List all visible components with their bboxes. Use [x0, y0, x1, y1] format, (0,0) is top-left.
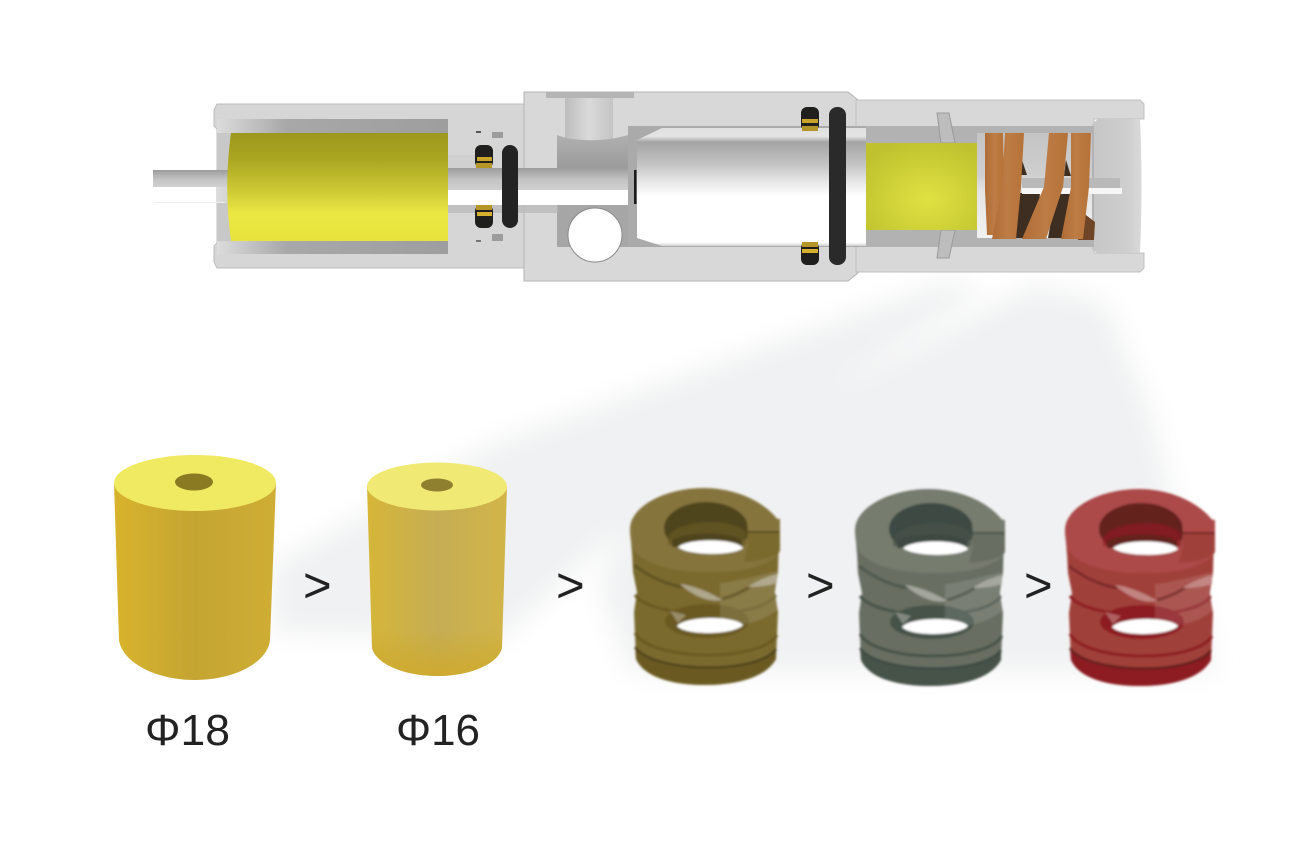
left yellow cylinder [227, 133, 448, 241]
right end cap [1092, 119, 1142, 253]
greater-than sign 1: > [303, 559, 332, 613]
greater-than sign 3: > [806, 559, 835, 613]
spring: red [1065, 489, 1215, 686]
left o-ring [502, 145, 518, 228]
lower grey chamber [557, 205, 628, 247]
piston [637, 128, 866, 246]
spring shadows [1014, 160, 1075, 238]
left seal lower [475, 205, 493, 228]
right yellow cylinder [866, 143, 977, 230]
spring: grey-green [855, 489, 1005, 686]
spring cavity backdrop [977, 133, 1092, 238]
smaller cylinder Φ16 [367, 462, 507, 676]
small gaskets [476, 131, 503, 242]
centre hole [175, 474, 213, 490]
housing: centre block [524, 92, 858, 281]
right seal upper [801, 107, 819, 131]
label: diameter 16: Φ16 [396, 706, 480, 755]
white through hole [568, 208, 622, 262]
washer [937, 113, 955, 258]
right rod [1022, 178, 1120, 188]
copper spring [985, 133, 1122, 240]
spring: olive [630, 488, 780, 685]
right cavity [866, 126, 1094, 247]
housing: right tube [856, 100, 1144, 272]
large cylinder Φ18 [114, 455, 276, 680]
port cap line [546, 92, 634, 98]
right o-ring [829, 107, 846, 265]
upper grey chamber [557, 135, 628, 170]
background light beams [272, 282, 1215, 672]
piston black end [634, 170, 636, 204]
top port [565, 98, 613, 143]
top face [367, 462, 507, 510]
centre hole [421, 478, 453, 492]
top face [114, 455, 276, 511]
greater-than sign 2: > [556, 559, 585, 613]
left cavity [217, 119, 448, 254]
rod band [153, 155, 638, 213]
greater-than sign 4: > [1024, 559, 1053, 613]
housing: left tube [214, 104, 526, 268]
left seal upper [475, 145, 493, 168]
label: diameter 18: Φ18 [145, 706, 230, 755]
hydraulic cylinder cross-section [153, 92, 1144, 281]
inner cavity centre [628, 126, 866, 247]
right seal lower [801, 242, 819, 265]
